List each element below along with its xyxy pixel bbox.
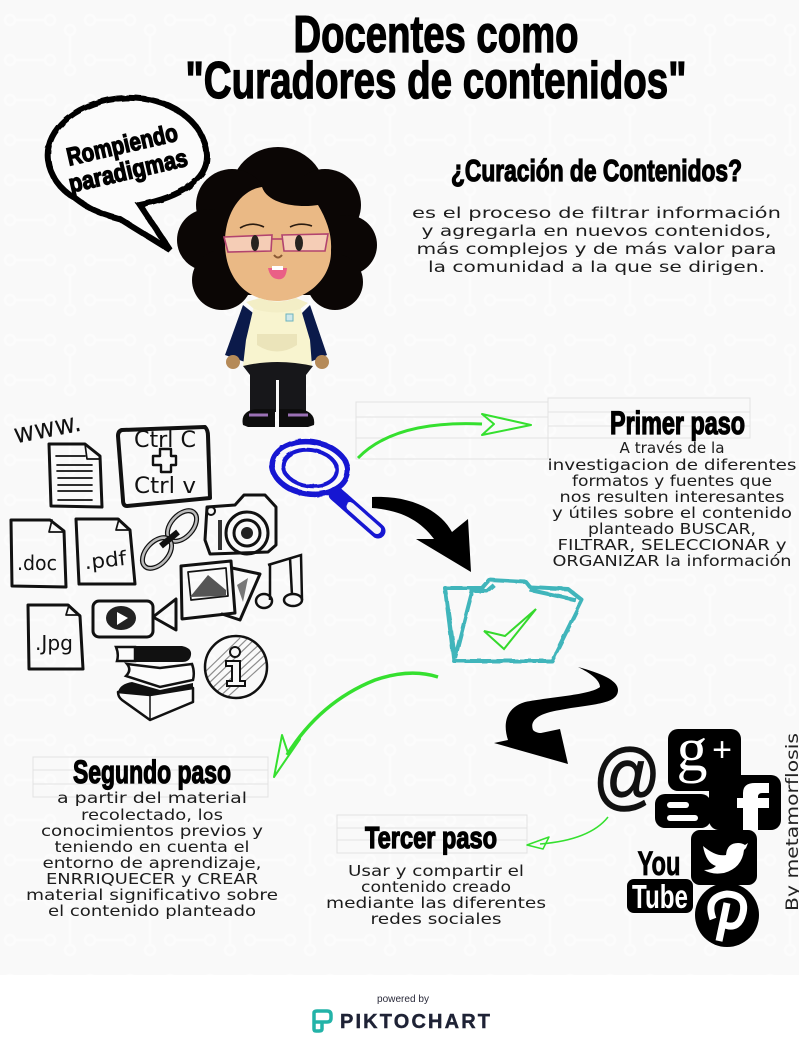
text block bbox=[548, 439, 796, 570]
icon: google plus bbox=[668, 716, 741, 791]
heading: Tercer paso bbox=[365, 820, 497, 855]
table background bbox=[356, 398, 750, 459]
arrow: black to folder bbox=[372, 497, 471, 572]
text block: y útiles sobre el contenido bbox=[552, 504, 792, 522]
icon: google plus: + bbox=[712, 731, 732, 769]
text: piktochart: PIKTOCHART bbox=[340, 1011, 490, 1033]
text block: mediante las diferentes bbox=[326, 894, 546, 912]
heading: Segundo paso bbox=[73, 754, 231, 790]
icon: photos bbox=[181, 561, 260, 620]
icon: document bbox=[49, 444, 102, 507]
mouth bbox=[268, 268, 287, 279]
bottom book bbox=[118, 682, 193, 695]
badge bbox=[286, 314, 293, 321]
icon: facebook bbox=[709, 770, 781, 830]
text block: Usar y compartir el bbox=[348, 862, 524, 880]
icon: magnifying glass bbox=[269, 437, 378, 531]
text block: entorno de aprendizaje, bbox=[42, 854, 262, 872]
shoes bbox=[242, 409, 314, 427]
icon: youtube bbox=[627, 845, 693, 915]
hair bbox=[177, 147, 377, 310]
icon: ctrl c + ctrl v bbox=[118, 427, 210, 506]
icon: chain link bbox=[137, 505, 202, 574]
icon: twitter bbox=[691, 830, 757, 885]
icon: music notes bbox=[256, 555, 302, 608]
middle book bbox=[126, 664, 194, 687]
heading: Primer paso bbox=[610, 405, 745, 441]
panel: segundo paso bbox=[26, 754, 278, 920]
text block: definition: y agregarla en nuevos contenidos, bbox=[422, 222, 772, 240]
arrow: green to tercer paso bbox=[527, 817, 608, 849]
label: www: www. bbox=[11, 407, 84, 450]
text block: teniendo en cuenta el bbox=[54, 838, 250, 856]
text block: nos resulten interesantes bbox=[560, 488, 784, 506]
icon: at sign: @ bbox=[593, 734, 661, 817]
icon: .pdf file bbox=[76, 519, 135, 584]
icon: piktochart logo bbox=[314, 1011, 331, 1031]
table background bbox=[337, 815, 527, 853]
icon: youtube: Tube bbox=[632, 878, 688, 915]
icon: blogger bbox=[655, 794, 711, 828]
icon: youtube: You bbox=[638, 845, 680, 883]
eyebrows bbox=[240, 224, 312, 228]
icon: ctrl c + ctrl v: Ctrl v bbox=[134, 474, 196, 499]
face bbox=[225, 187, 331, 301]
table background bbox=[33, 757, 268, 797]
text: powered by: powered by bbox=[377, 994, 429, 1005]
trousers bbox=[243, 362, 313, 412]
icon: .doc file: .doc bbox=[17, 551, 57, 575]
icon: folder with check bbox=[445, 580, 582, 661]
speech bubble: Rompiendo paradigmas bbox=[48, 98, 207, 250]
icon group: documents and media sources bbox=[11, 407, 302, 720]
text block: definition: la comunidad a la que se dirigen. bbox=[428, 258, 765, 276]
text block: el contenido planteado bbox=[48, 902, 256, 920]
panel: primer paso bbox=[356, 398, 796, 570]
hands bbox=[226, 355, 329, 369]
title: Docentes como bbox=[294, 6, 578, 64]
character: teacher avatar bbox=[177, 147, 377, 427]
speech bubble: Rompiendo paradigmas: paradigmas bbox=[66, 144, 190, 198]
icon: ctrl c + ctrl v: Ctrl C bbox=[134, 428, 196, 453]
text block: planteado BUSCAR, bbox=[588, 520, 756, 538]
icon: video camera bbox=[93, 599, 176, 637]
nose bbox=[274, 255, 282, 258]
text block: definition bbox=[412, 204, 781, 276]
text block: contenido creado bbox=[361, 878, 511, 896]
text block: investigacion de diferentes bbox=[548, 456, 796, 474]
icon: .jpg file: .Jpg bbox=[35, 631, 73, 655]
text block: redes sociales bbox=[370, 910, 502, 928]
text block bbox=[26, 789, 278, 920]
text block: FILTRAR, SELECCIONAR y bbox=[558, 536, 786, 554]
text block: definition: es el proceso de filtrar información bbox=[412, 204, 781, 222]
arrow: green to primer paso bbox=[358, 414, 531, 458]
title bbox=[186, 6, 686, 110]
teeth bbox=[272, 266, 283, 270]
icon: camera bbox=[205, 495, 276, 554]
icon: .pdf file: .pdf bbox=[83, 546, 128, 574]
icon: .jpg file bbox=[28, 605, 83, 669]
text block: conocimientos previos y bbox=[41, 822, 263, 840]
text block: ENRRIQUECER y CREAR bbox=[46, 870, 258, 888]
pocket bbox=[257, 334, 297, 352]
icon: info bbox=[205, 636, 267, 702]
arrow: black to social bbox=[494, 667, 618, 764]
speech bubble: Rompiendo paradigmas: Rompiendo bbox=[64, 119, 180, 172]
icons: social networks bbox=[627, 716, 781, 947]
text block: definition: más complejos y de más valor para bbox=[416, 240, 776, 258]
collar bbox=[246, 298, 308, 312]
icon: .doc file bbox=[11, 520, 66, 587]
text block: material significativo sobre bbox=[26, 886, 278, 904]
text block: ORGANIZAR la información bbox=[552, 552, 792, 570]
icon: books bbox=[116, 646, 194, 720]
glasses bbox=[224, 234, 328, 252]
sleeves bbox=[225, 305, 327, 362]
text block: formatos y fuentes que bbox=[572, 472, 772, 490]
text block: a partir del material bbox=[57, 789, 247, 807]
top book bbox=[116, 647, 135, 661]
arrow: green to segundo paso bbox=[274, 673, 438, 777]
icon: pinterest bbox=[695, 883, 759, 947]
icon: google plus: g bbox=[676, 716, 708, 784]
text block: A través de la bbox=[620, 439, 724, 457]
panel: tercer paso bbox=[326, 815, 546, 928]
footer: piktochart branding bbox=[314, 994, 490, 1033]
eyes bbox=[251, 235, 303, 251]
text block: recolectado, los bbox=[81, 806, 223, 824]
text block bbox=[326, 862, 546, 928]
shirt bbox=[243, 306, 312, 366]
